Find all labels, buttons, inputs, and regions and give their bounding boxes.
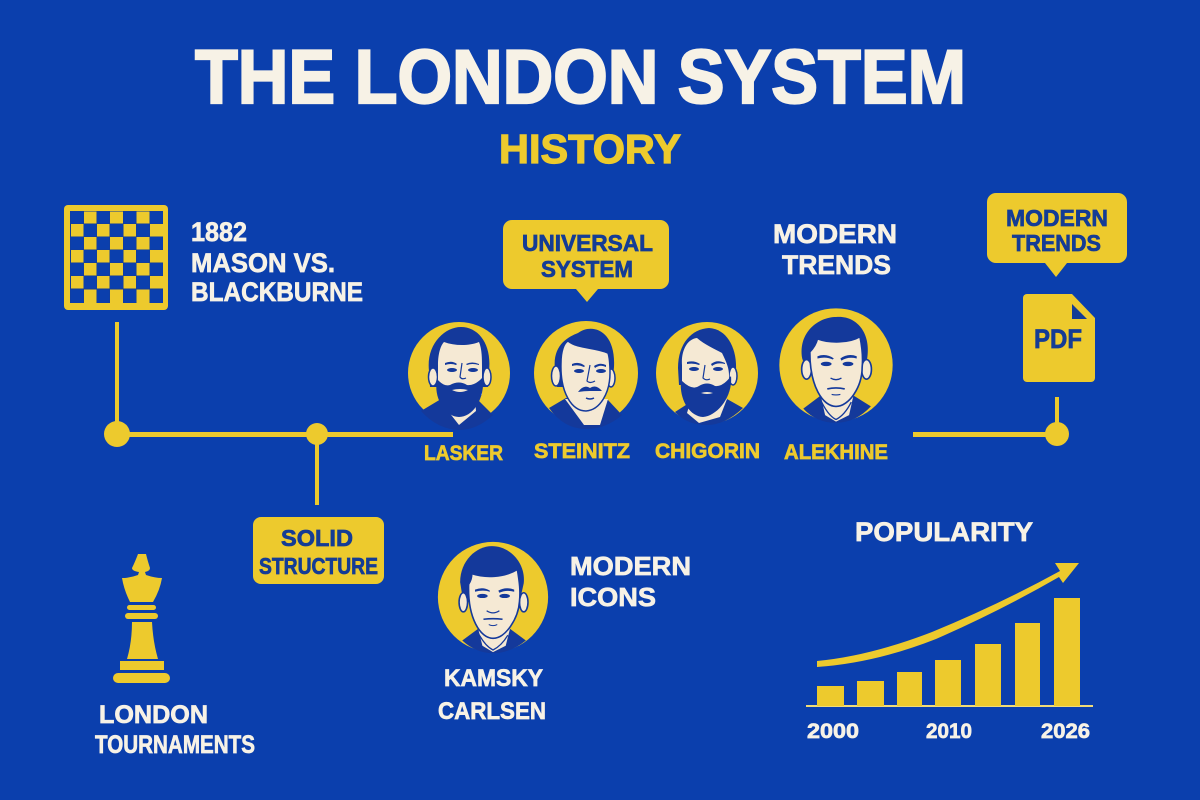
icon: chess king: [113, 554, 170, 683]
london tournaments label: LONDON: [99, 701, 208, 729]
callout: universal system: SYSTEM: [541, 256, 633, 282]
callout: modern trends: TRENDS: [1012, 230, 1101, 256]
portrait: chigorin: [656, 322, 758, 425]
icon: pdf document: [1023, 294, 1095, 382]
chart years: [807, 720, 1090, 743]
callout: universal system: [503, 220, 669, 302]
callout: modern trends: MODERN: [1006, 205, 1108, 231]
portrait: modern icons: [438, 542, 548, 653]
london tournaments label: TOURNAMENTS: [95, 731, 255, 759]
subtitle: HISTORY: [499, 126, 681, 172]
timeline: [104, 322, 1069, 505]
popularity heading: POPULARITY: [855, 517, 1033, 547]
bar chart: popularity 2000 to 2026: [806, 563, 1093, 707]
chart years: 2000: [807, 720, 859, 743]
modern icon names: [438, 665, 546, 725]
modern trends label: TRENDS: [782, 250, 891, 280]
1882 label: MASON VS.: [191, 248, 335, 278]
modern trends label: [773, 219, 897, 280]
callout: modern trends: [987, 193, 1127, 277]
timeline names: ALEKHINE: [784, 441, 888, 464]
timeline names: CHIGORIN: [655, 440, 760, 463]
timeline names: [424, 440, 888, 465]
chart years: 2010: [926, 720, 972, 743]
1882 label: BLACKBURNE: [191, 277, 363, 307]
arrow: rising trend: [817, 563, 1079, 667]
modern icons label: ICONS: [570, 582, 656, 612]
modern icons label: MODERN: [570, 551, 691, 581]
callout: universal system: UNIVERSAL: [522, 230, 653, 256]
icon: pdf document: PDF: [1034, 324, 1082, 354]
portrait: alekhine: [779, 308, 893, 423]
portrait: steinitz: [534, 321, 638, 429]
chart years: 2026: [1041, 720, 1090, 743]
icon: chessboard: [64, 205, 168, 310]
1882 label: [191, 217, 363, 307]
callout: solid structure: SOLID: [281, 525, 353, 551]
1882 label: 1882: [191, 217, 247, 247]
callout: solid structure: [253, 517, 384, 584]
modern icon names: CARLSEN: [438, 698, 546, 725]
portrait: lasker: [408, 322, 510, 430]
london tournaments label: [95, 701, 255, 759]
modern icons label: [570, 551, 691, 612]
modern icon names: KAMSKY: [444, 665, 543, 692]
title: THE LONDON SYSTEM: [195, 35, 966, 120]
modern trends label: MODERN: [773, 219, 897, 249]
timeline names: LASKER: [424, 442, 503, 465]
timeline names: STEINITZ: [534, 440, 630, 463]
callout: solid structure: STRUCTURE: [259, 553, 378, 579]
